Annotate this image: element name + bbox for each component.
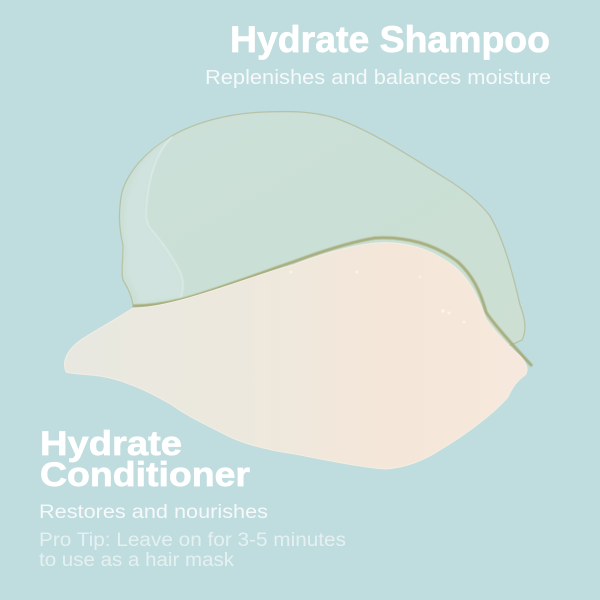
subtitle: conditioner benefit: Restores and nourishes <box>39 502 268 523</box>
title: Hydrate Conditioner <box>40 425 250 494</box>
pro tip: Pro Tip: Leave on for 3-5 minutes <box>39 530 346 551</box>
shampoo inner shadow edge <box>133 238 532 366</box>
subtitle: shampoo benefit: Replenishes and balances moisture <box>205 67 551 89</box>
conditioner highlights <box>290 271 465 323</box>
pro tip <box>39 530 346 571</box>
title: Hydrate Shampoo: Hydrate Shampoo <box>230 19 550 60</box>
pro tip: to use as a hair mask <box>39 550 235 571</box>
title: Hydrate Conditioner: Conditioner <box>40 456 250 494</box>
shampoo left light band <box>125 137 183 303</box>
shampoo highlight fold <box>146 137 183 298</box>
title: Hydrate Conditioner: Hydrate <box>40 425 182 463</box>
conditioner swatch <box>64 243 527 469</box>
shampoo swatch <box>119 112 532 366</box>
